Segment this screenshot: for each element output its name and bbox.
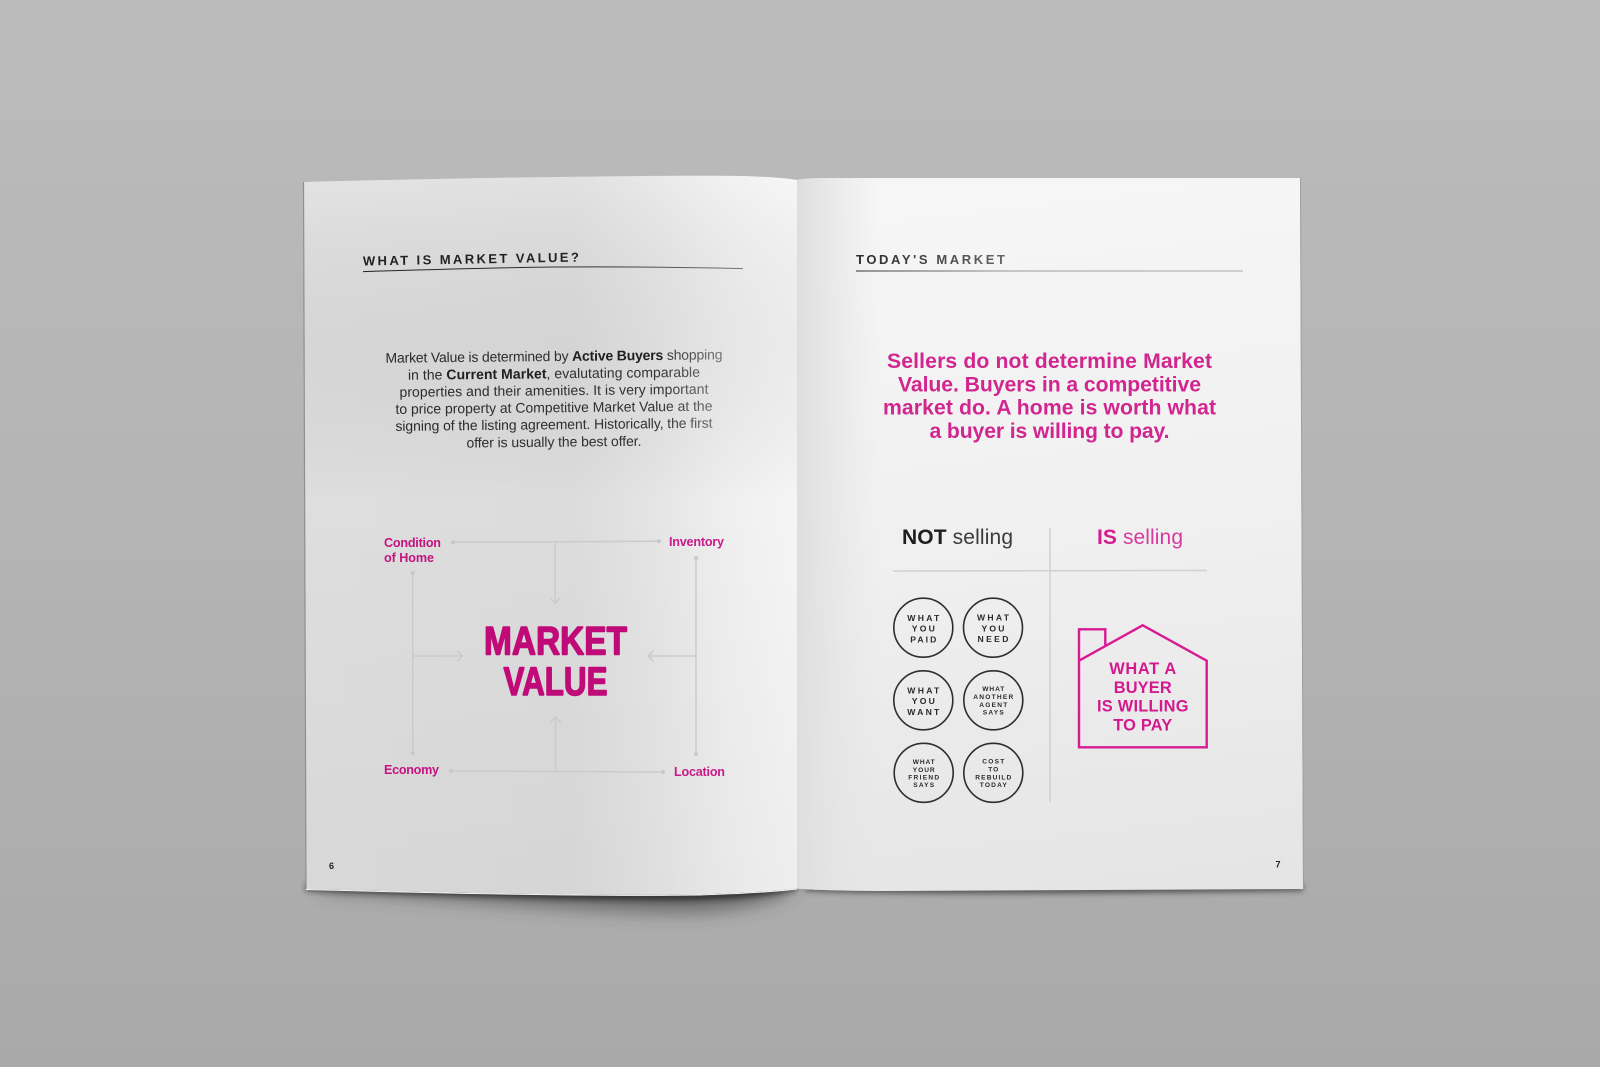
icon: house with buyer statement: WHAT A	[1109, 660, 1176, 678]
heading: today's market: TODAY'S MARKET	[856, 252, 1005, 267]
circle: what another agent says: SAYS	[983, 710, 1004, 716]
text block: market value definition	[385, 346, 723, 451]
circle: what another agent says: ANOTHER	[973, 694, 1014, 701]
diagram: market value factors	[384, 535, 725, 779]
icon: house with buyer statement: TO PAY	[1113, 717, 1172, 735]
panel: left page	[303, 176, 797, 895]
circle: what you paid: PAID	[910, 635, 936, 645]
text block: sellers statement	[883, 350, 1216, 443]
circle: cost to rebuild today	[964, 743, 1023, 802]
circle: what your friend says	[894, 743, 953, 802]
label: location: Location	[674, 765, 725, 779]
text block: market value definition: properties and their amenities. It is very important	[399, 381, 709, 400]
label: economy: Economy	[384, 763, 439, 777]
text block: market value definition: signing of the listing agreement. Historically, the first	[395, 415, 713, 434]
panel: right page	[797, 178, 1304, 891]
connector arrows	[413, 541, 696, 772]
circle: what another agent says: AGENT	[979, 702, 1007, 709]
label: inventory: Inventory	[669, 535, 724, 549]
circle: what another agent says: WHAT	[982, 686, 1004, 693]
circle: what your friend says: SAYS	[913, 782, 935, 789]
circle: what another agent says	[964, 671, 1023, 730]
circle: what you need: WHAT	[977, 612, 1010, 622]
label: condition of home: of Home	[384, 551, 434, 565]
title: market value	[484, 620, 627, 704]
brochure spread	[303, 176, 1304, 912]
circle: what you want: WHAT	[907, 686, 940, 696]
page number 6: 6	[329, 861, 334, 871]
circle: what you need: YOU	[982, 623, 1004, 633]
text block: sellers statement: a buyer is willing to pay.	[930, 420, 1170, 443]
text block: market value definition: to price property at Competitive Market Value at the	[395, 398, 713, 417]
title: market value: VALUE	[504, 660, 608, 704]
circle: what you need	[964, 598, 1022, 657]
circle: what you want	[894, 671, 953, 730]
circle: what your friend says: WHAT	[913, 759, 935, 766]
text block: market value definition: in the Current Market, evalutating comparable	[408, 364, 700, 383]
icon: house with buyer statement: BUYER	[1114, 679, 1172, 697]
icon: house with buyer statement: IS WILLING	[1097, 698, 1188, 716]
circle: cost to rebuild today: COST	[982, 758, 1004, 766]
circle: what you want: YOU	[912, 696, 935, 706]
heading: what is market value	[363, 250, 743, 272]
label: condition of home	[384, 536, 441, 565]
circle: what you paid	[894, 598, 953, 657]
text block: sellers statement: market do. A home is worth what	[883, 397, 1216, 420]
title: market value: MARKET	[484, 620, 627, 664]
circle: cost to rebuild today: REBUILD	[975, 774, 1012, 782]
column heading: is selling: IS selling	[1097, 526, 1183, 549]
heading: what is market value: WHAT IS MARKET VALUE?	[363, 250, 579, 268]
text block: market value definition: Market Value is determined by Active Buyers shopping	[385, 346, 723, 366]
text block: sellers statement: Sellers do not determine Market	[887, 350, 1212, 373]
page number 7: 7	[1276, 860, 1281, 870]
label: condition of home: Condition	[384, 536, 441, 550]
text block: sellers statement: Value. Buyers in a competitive	[898, 373, 1201, 396]
icon: house with buyer statement	[1079, 625, 1207, 747]
table dividers	[893, 528, 1207, 802]
circle: what you paid: WHAT	[907, 613, 940, 623]
circle: cost to rebuild today: TO	[988, 766, 998, 774]
circle: what you paid: YOU	[912, 624, 935, 634]
text block: market value definition: offer is usually the best offer.	[466, 433, 642, 451]
circle: what your friend says: FRIEND	[908, 775, 939, 782]
column heading: not selling: NOT selling	[902, 526, 1013, 549]
circle: what your friend says: YOUR	[913, 767, 935, 774]
circle: cost to rebuild today: TODAY	[980, 782, 1007, 789]
circle: what you want: WANT	[907, 707, 940, 717]
circle: what you need: NEED	[978, 634, 1008, 644]
